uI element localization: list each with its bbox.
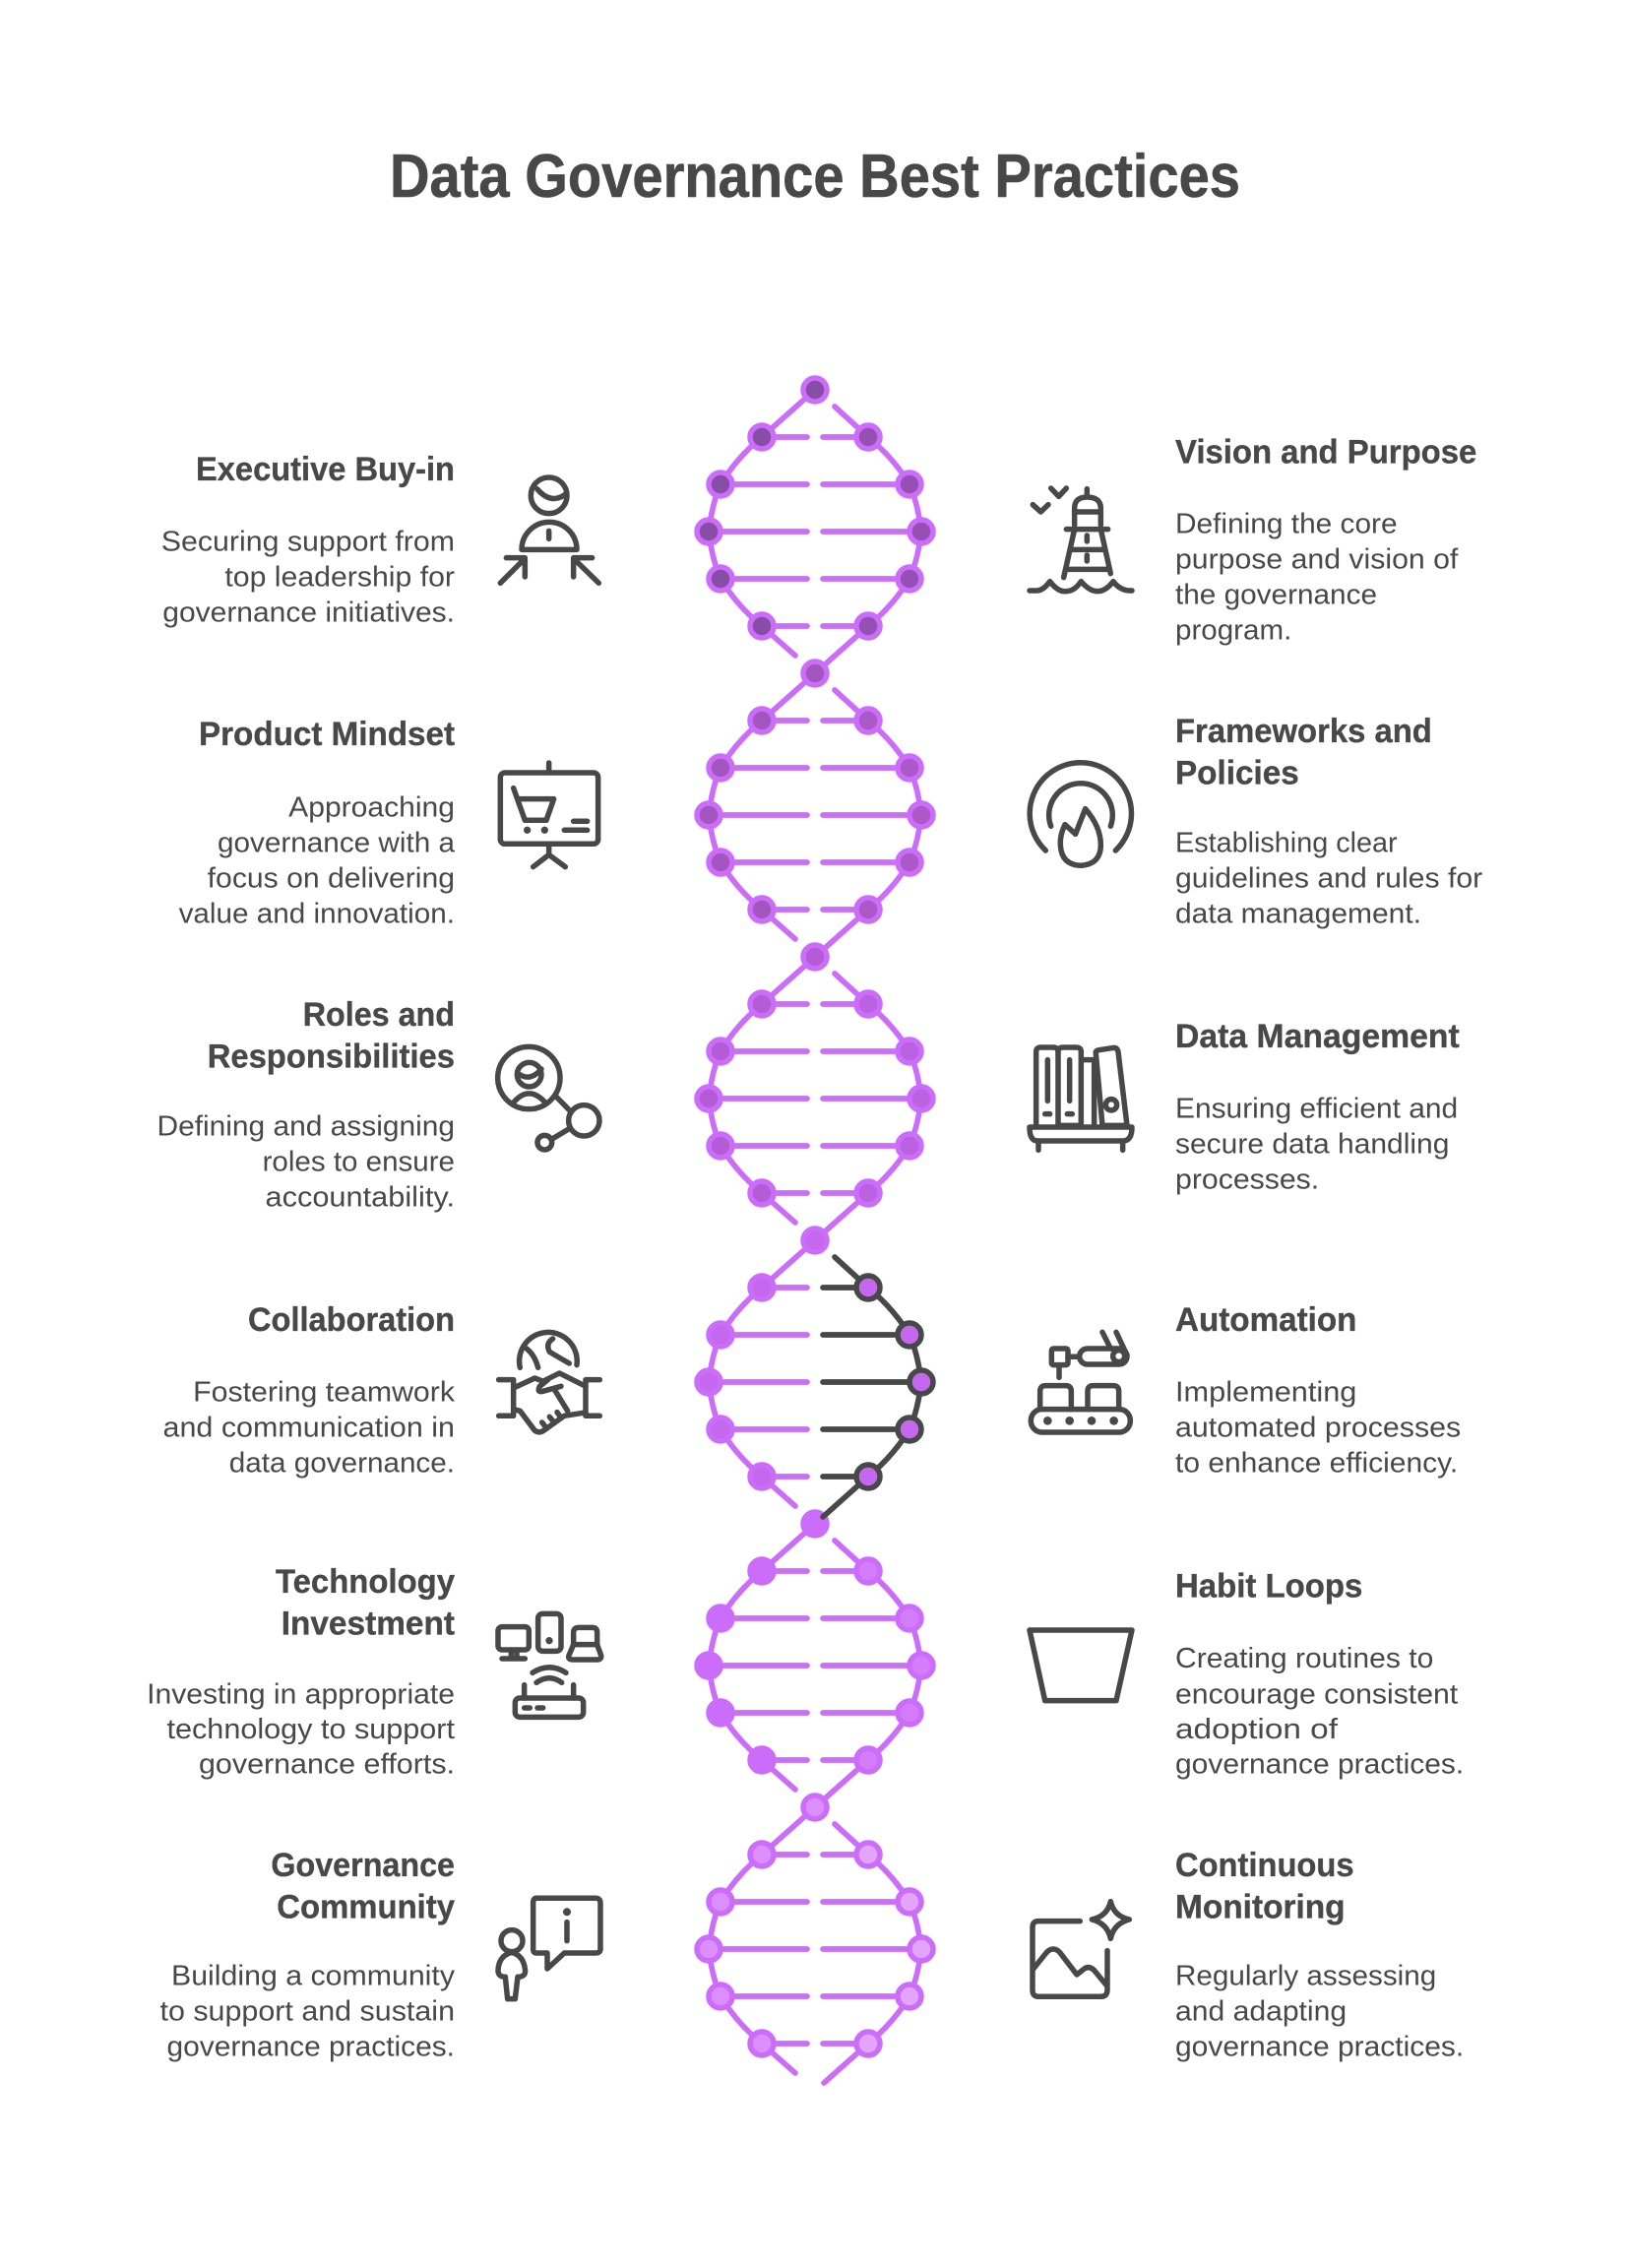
heading: [1175, 713, 1432, 792]
description: [1175, 1961, 1464, 2063]
heading: Executive Buy-in: [196, 451, 455, 488]
description: Investing in appropriate: [147, 1678, 455, 1710]
description: automated processes: [1175, 1413, 1461, 1444]
description: [163, 1377, 456, 1479]
icon: devices and router: [498, 1613, 601, 1717]
description: to support and sustain: [159, 1996, 455, 2028]
panel: Product Mindset: [179, 716, 455, 929]
description: Defining and assigning: [157, 1110, 455, 1142]
description: [161, 527, 456, 628]
icon: person with info bubble: [498, 1898, 600, 1999]
description: processes.: [1175, 1164, 1319, 1195]
description: guidelines and rules for: [1175, 862, 1483, 894]
DNA helix: [697, 378, 933, 2083]
panel: Data Management: [1175, 1018, 1460, 1195]
description: secure data handling: [1175, 1129, 1449, 1161]
description: [147, 1678, 455, 1780]
panel: Automation: [1175, 1301, 1461, 1479]
description: program.: [1175, 614, 1291, 646]
description: focus on delivering: [208, 862, 455, 894]
description: value and innovation.: [179, 898, 455, 929]
description: Implementing: [1175, 1377, 1356, 1409]
description: [1175, 1643, 1464, 1780]
description: [1175, 1377, 1461, 1479]
description: Establishing clear: [1175, 827, 1398, 858]
heading: Monitoring: [1175, 1889, 1346, 1926]
description: and adapting: [1175, 1996, 1347, 2028]
icon: robot arm and conveyor: [1031, 1332, 1130, 1432]
heading: Product Mindset: [199, 716, 455, 753]
heading: Continuous: [1175, 1847, 1354, 1884]
heading: [208, 996, 455, 1076]
description: [159, 1961, 456, 2063]
description: [1175, 509, 1458, 646]
description: Regularly assessing: [1175, 1961, 1436, 1992]
description: governance initiatives.: [162, 597, 455, 628]
description: the governance: [1175, 579, 1377, 610]
heading: Collaboration: [248, 1301, 455, 1339]
description: [1175, 827, 1483, 929]
icon: globe and handshake: [499, 1332, 599, 1432]
description: roles to ensure: [263, 1146, 455, 1177]
heading: Governance: [271, 1847, 455, 1884]
icon: bucket: [1030, 1630, 1132, 1701]
heading: Investment: [282, 1606, 455, 1643]
heading: Frameworks and: [1175, 713, 1432, 750]
description: Creating routines to: [1175, 1643, 1433, 1674]
description: governance efforts.: [199, 1748, 455, 1780]
panel: Habit Loops: [1175, 1567, 1464, 1780]
heading: [271, 1847, 455, 1926]
description: Fostering teamwork: [193, 1377, 456, 1409]
icon: lighthouse: [1030, 488, 1132, 592]
description: to enhance efficiency.: [1175, 1447, 1458, 1479]
description: data governance.: [229, 1447, 455, 1479]
heading: Vision and Purpose: [1175, 433, 1476, 471]
panel: Vision and Purpose: [1175, 433, 1476, 646]
icon: person with arrows: [500, 477, 598, 583]
heading: Technology: [276, 1563, 455, 1601]
heading: Policies: [1175, 755, 1299, 792]
helix segment 2: [697, 662, 933, 957]
panel: Governance Community: [159, 1847, 456, 2063]
description: Securing support from: [161, 527, 455, 558]
helix segment 6: [697, 1796, 933, 2083]
description: governance with a: [218, 827, 455, 858]
panel: Collaboration: [163, 1301, 456, 1479]
heading: Automation: [1175, 1301, 1356, 1339]
icon: image with sparkle: [1033, 1902, 1129, 1996]
heading: Data Management: [1175, 1018, 1460, 1055]
icon: books on a shelf: [1030, 1047, 1132, 1150]
icon: target with flame: [1030, 763, 1131, 865]
description: Defining the core: [1175, 509, 1398, 540]
description: [157, 1110, 455, 1213]
description: purpose and vision of: [1175, 544, 1458, 576]
description: adoption of: [1175, 1714, 1338, 1745]
panel: Technology Investment: [147, 1563, 455, 1780]
description: accountability.: [266, 1181, 455, 1213]
heading: [1175, 1847, 1354, 1926]
helix segment 1: [697, 378, 933, 673]
heading: Responsibilities: [208, 1039, 455, 1076]
panel: Frameworks and Policies: [1175, 713, 1483, 929]
icon: person network: [498, 1046, 599, 1150]
panel: Roles and Responsibilities: [157, 996, 455, 1213]
description: governance practices.: [167, 2032, 455, 2063]
title: Data Governance Best Practices: [390, 143, 1240, 211]
heading: [276, 1563, 455, 1643]
description: and communication in: [163, 1413, 455, 1444]
panel: Continuous Monitoring: [1175, 1847, 1464, 2063]
description: Building a community: [171, 1961, 456, 1992]
description: governance practices.: [1175, 2032, 1464, 2063]
panel: Executive Buy-in: [161, 451, 456, 628]
heading: Roles and: [303, 996, 455, 1034]
description: technology to support: [167, 1714, 455, 1745]
description: top leadership for: [224, 561, 456, 593]
helix segment 4, highlighted: [697, 1228, 933, 1517]
description: governance practices.: [1175, 1748, 1464, 1780]
description: Approaching: [288, 792, 455, 824]
heading: Community: [277, 1889, 455, 1926]
helix segment 3: [697, 945, 933, 1240]
description: [1175, 1094, 1458, 1195]
description: [179, 792, 455, 929]
icon: presentation board with cart: [500, 763, 598, 867]
heading: Habit Loops: [1175, 1567, 1362, 1605]
helix segment 5: [697, 1512, 933, 1807]
description: data management.: [1175, 898, 1421, 929]
description: Ensuring efficient and: [1175, 1094, 1458, 1125]
description: encourage consistent: [1175, 1678, 1458, 1710]
